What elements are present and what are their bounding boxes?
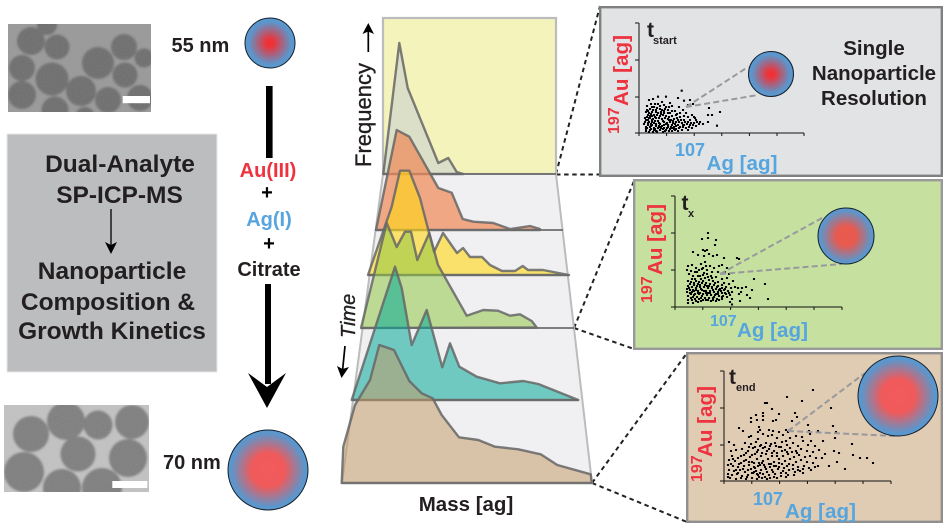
x label: Ag [ag] xyxy=(737,319,808,342)
axis label: Time: Time xyxy=(338,294,360,338)
y label: 197 xyxy=(606,107,623,134)
particle: 55 nm xyxy=(245,18,295,68)
x label: Ag [ag] xyxy=(706,152,777,175)
distribution: orange xyxy=(376,130,540,230)
reagents xyxy=(237,160,301,281)
reagents: + xyxy=(261,182,273,204)
y label: 197 xyxy=(689,455,706,482)
dashed zoom lines xyxy=(720,218,842,274)
scatter points xyxy=(687,233,768,304)
caption: Resolution xyxy=(821,87,927,110)
y label: 197 xyxy=(639,276,656,303)
particle xyxy=(748,52,794,96)
arrow: time xyxy=(337,346,349,378)
dashed zoom lines xyxy=(788,373,895,436)
y label: Au [ag] xyxy=(694,386,717,457)
label: 55 nm: 55 nm xyxy=(172,35,229,57)
y label: Au [ag] xyxy=(610,35,633,106)
axes xyxy=(671,196,842,310)
heading: Dual-Analyte SP-ICP-MS: SP-ICP-MS xyxy=(56,182,183,209)
scatter points xyxy=(728,390,873,479)
dashed connectors xyxy=(556,6,687,522)
time label: end xyxy=(736,382,756,394)
axis label: Frequency: Frequency xyxy=(351,63,376,167)
arrow: method to outcome xyxy=(105,209,117,254)
reagents: + xyxy=(263,233,275,255)
heading: outcome: Nanoparticle xyxy=(38,258,186,285)
micrograph: 70 nm particles xyxy=(4,405,149,492)
particle xyxy=(818,208,874,264)
y label xyxy=(606,35,633,134)
x label xyxy=(710,313,808,342)
particle xyxy=(858,356,938,436)
x label: 107 xyxy=(675,140,705,160)
time label xyxy=(729,366,756,394)
distribution: t end xyxy=(342,345,592,483)
axis label: Mass: Mass [ag] xyxy=(419,493,513,516)
particle: 70 nm xyxy=(228,430,308,510)
x label: 107 xyxy=(753,489,783,509)
time label: start xyxy=(653,35,677,47)
caption: Single xyxy=(843,37,905,60)
time label: t xyxy=(729,366,736,389)
panel: t end scatter xyxy=(687,353,942,523)
caption: Nanoparticle xyxy=(812,62,936,85)
label: 70 nm: 70 nm xyxy=(163,452,221,474)
baseline 4 xyxy=(361,327,574,329)
time label: t xyxy=(682,192,688,215)
heading: Dual-Analyte SP-ICP-MS xyxy=(45,151,195,209)
distribution: yellow xyxy=(368,171,569,275)
heading: Dual-Analyte SP-ICP-MS: Dual-Analyte xyxy=(45,151,195,178)
panel: t start scatter xyxy=(600,7,942,176)
heading: outcome: Growth Kinetics xyxy=(18,318,206,345)
distribution: green xyxy=(361,223,537,328)
panel: method summary xyxy=(7,134,217,372)
arrow: frequency xyxy=(362,23,374,52)
baseline 5 xyxy=(352,399,578,401)
y label xyxy=(639,204,667,303)
x label xyxy=(753,489,856,523)
heading: outcome xyxy=(18,258,206,345)
arrow shaft: upper xyxy=(266,86,273,158)
scatter points xyxy=(644,91,720,132)
chart: mass distributions over time xyxy=(342,18,592,483)
x label xyxy=(675,140,777,175)
dashed zoom lines xyxy=(686,67,758,107)
y label: Au [ag] xyxy=(644,204,667,275)
time label xyxy=(647,19,677,47)
time label xyxy=(682,192,695,220)
baseline 3 xyxy=(368,274,569,276)
micrograph: 55 nm particles xyxy=(8,24,151,112)
distribution: t start xyxy=(383,43,463,174)
heading: outcome: Composition & xyxy=(21,289,195,316)
time label: x xyxy=(688,208,695,220)
axes xyxy=(720,371,891,484)
baseline 2 xyxy=(375,229,563,231)
reagents: Au(III) xyxy=(240,160,296,182)
baseline 1 xyxy=(383,173,556,175)
x label: 107 xyxy=(710,313,737,330)
caption xyxy=(812,37,936,110)
x label: Ag [ag] xyxy=(785,500,856,523)
y label xyxy=(689,386,717,482)
time label: t xyxy=(647,19,654,42)
axes xyxy=(635,23,804,136)
reagents: Ag(I) xyxy=(246,209,292,231)
reagents: Citrate xyxy=(237,259,301,281)
panel: t x scatter xyxy=(634,180,942,349)
distribution: teal xyxy=(352,267,578,400)
arrow: reaction progress xyxy=(248,284,286,408)
frame: receding floor xyxy=(342,174,592,483)
frame: top distribution plane xyxy=(383,18,556,174)
